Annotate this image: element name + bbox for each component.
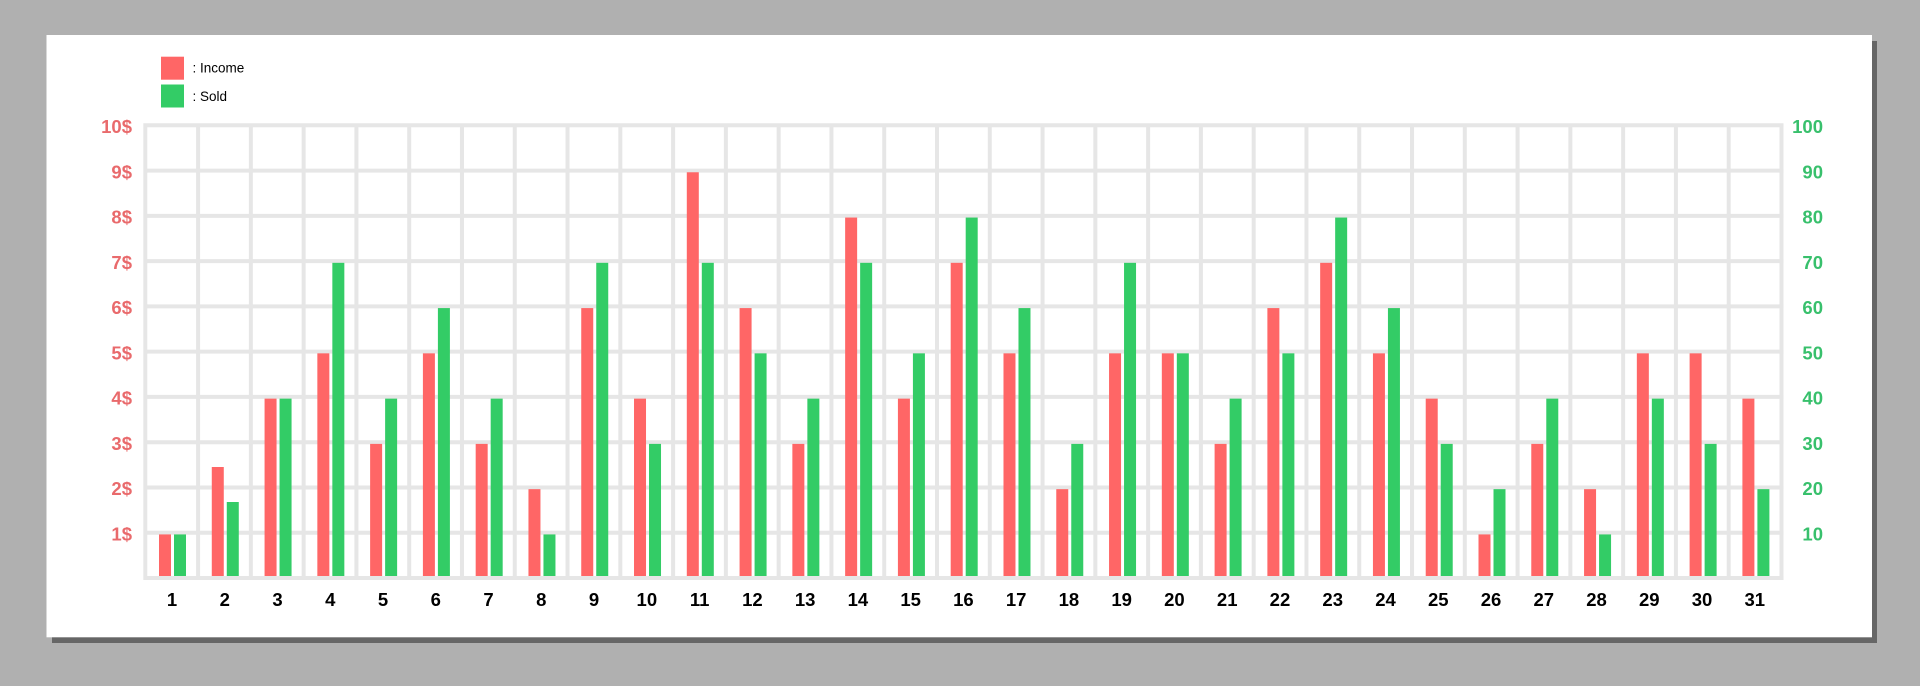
x axis: day labels: 9 bbox=[589, 589, 599, 610]
right axis: sold labels: 80 bbox=[1802, 206, 1823, 228]
x axis: day labels: 18 bbox=[1059, 589, 1079, 610]
bars: income bbox=[159, 172, 1754, 576]
x axis: day labels: 31 bbox=[1745, 589, 1765, 610]
left axis: income labels: 10$ bbox=[101, 116, 133, 137]
x axis: day labels: 16 bbox=[953, 589, 974, 610]
legend bbox=[161, 57, 244, 108]
x axis: day labels bbox=[167, 589, 1765, 610]
x axis: day labels: 17 bbox=[1006, 589, 1026, 610]
x axis: day labels: 28 bbox=[1586, 589, 1607, 610]
right axis: sold labels bbox=[1792, 116, 1823, 544]
x axis: day labels: 3 bbox=[272, 589, 283, 610]
legend: sold: : Sold bbox=[192, 89, 227, 104]
x axis: day labels: 22 bbox=[1270, 589, 1290, 610]
x axis: day labels: 1 bbox=[167, 589, 177, 610]
left axis: income labels: 1$ bbox=[111, 523, 133, 544]
right axis: sold labels: 70 bbox=[1802, 252, 1823, 273]
left axis: income labels: 3$ bbox=[111, 433, 133, 454]
left axis: income labels: 9$ bbox=[111, 161, 133, 182]
x axis: day labels: 27 bbox=[1533, 589, 1554, 610]
x axis: day labels: 10 bbox=[637, 589, 657, 610]
legend: income: : Income bbox=[192, 61, 244, 76]
right axis: sold labels: 100 bbox=[1792, 116, 1823, 137]
x axis: day labels: 13 bbox=[795, 589, 815, 610]
x axis: day labels: 24 bbox=[1375, 589, 1396, 610]
left axis: income labels: 4$ bbox=[111, 388, 133, 409]
bars: sold bbox=[174, 218, 1769, 576]
x axis: day labels: 14 bbox=[848, 589, 869, 610]
right axis: sold labels: 90 bbox=[1802, 161, 1823, 182]
x axis: day labels: 19 bbox=[1111, 589, 1132, 610]
x axis: day labels: 23 bbox=[1322, 589, 1343, 610]
x axis: day labels: 11 bbox=[690, 589, 709, 610]
x axis: day labels: 5 bbox=[378, 589, 388, 610]
x axis: day labels: 29 bbox=[1639, 589, 1660, 610]
right axis: sold labels: 30 bbox=[1802, 433, 1823, 454]
x axis: day labels: 4 bbox=[325, 589, 336, 610]
x axis: day labels: 26 bbox=[1481, 589, 1501, 610]
x axis: day labels: 12 bbox=[742, 589, 763, 610]
right axis: sold labels: 20 bbox=[1802, 478, 1823, 499]
chart grid bbox=[143, 123, 1783, 580]
left axis: income labels bbox=[101, 116, 133, 544]
x axis: day labels: 7 bbox=[483, 589, 494, 610]
x axis: day labels: 2 bbox=[220, 589, 230, 610]
x axis: day labels: 25 bbox=[1428, 589, 1449, 610]
right axis: sold labels: 60 bbox=[1802, 297, 1823, 318]
right axis: sold labels: 10 bbox=[1802, 523, 1823, 544]
right axis: sold labels: 40 bbox=[1802, 388, 1823, 409]
left axis: income labels: 7$ bbox=[111, 252, 133, 273]
left axis: income labels: 8$ bbox=[111, 206, 133, 228]
x axis: day labels: 20 bbox=[1164, 589, 1185, 610]
left axis: income labels: 6$ bbox=[111, 297, 133, 318]
left axis: income labels: 5$ bbox=[111, 342, 133, 363]
x axis: day labels: 6 bbox=[431, 589, 441, 610]
left axis: income labels: 2$ bbox=[111, 478, 133, 499]
x axis: day labels: 15 bbox=[900, 589, 921, 610]
x axis: day labels: 8 bbox=[536, 589, 546, 610]
x axis: day labels: 30 bbox=[1692, 589, 1712, 610]
x axis: day labels: 21 bbox=[1217, 589, 1237, 610]
right axis: sold labels: 50 bbox=[1802, 342, 1823, 363]
